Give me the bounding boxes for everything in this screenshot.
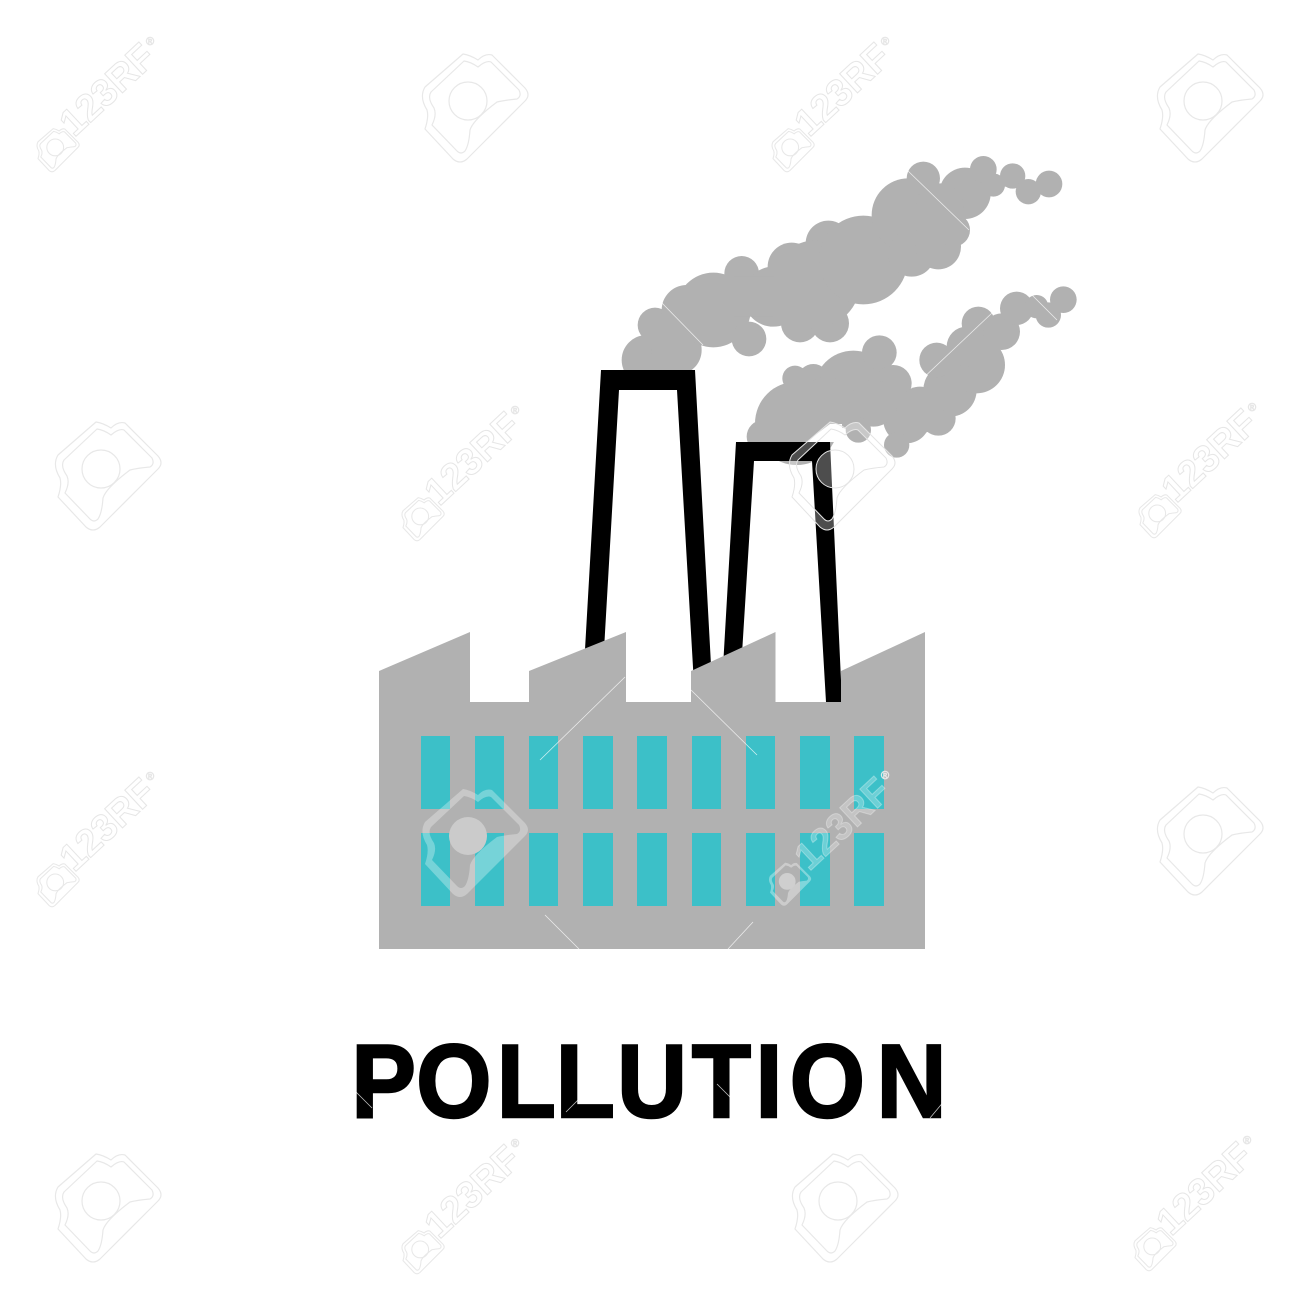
lower smoke plume body <box>747 286 1077 465</box>
watermark: 123RF bottom right: 123RF <box>1149 1135 1261 1243</box>
watermark: 123RF bottom left: 123RF <box>417 1138 529 1246</box>
stamp: second row over chimney <box>789 422 895 530</box>
stamp: over factory windows <box>422 789 528 897</box>
watermark: 123RF row two right: 123RF <box>1154 402 1266 510</box>
stamp: top row right <box>1157 54 1263 162</box>
stamp: third row right <box>1157 787 1263 895</box>
lower smoke plume lobes <box>846 417 909 458</box>
watermark: 123RF bottom right: ® <box>1243 1135 1251 1147</box>
gap under lower plume <box>806 424 842 442</box>
watermark: 123RF top centre: 123RF <box>787 36 899 144</box>
tall chimney <box>582 370 713 702</box>
watermark: 123RF top left: ® <box>146 36 154 48</box>
watermark: 123RF row two right: ® <box>1248 402 1256 414</box>
stamp: bottom row centre <box>792 1154 898 1262</box>
stamp: bottom row left <box>55 1154 161 1262</box>
upper smoke plume <box>622 156 1062 385</box>
short chimney <box>721 442 842 702</box>
bottom row of windows <box>421 833 884 906</box>
top row of windows <box>421 736 884 809</box>
stamp: top row left <box>422 54 528 162</box>
watermark: 123RF over factory: ® <box>881 770 889 782</box>
smoke plumes <box>622 156 1077 465</box>
factory silhouette <box>379 632 925 949</box>
factory building <box>379 632 925 949</box>
watermark: 123RF over factory: 123RF <box>787 770 899 878</box>
watermark: 123RF row two left: 123RF <box>417 405 529 513</box>
watermark: 123RF top left: 123RF <box>52 36 164 144</box>
stamp: second row left <box>55 422 161 530</box>
faint lattice lines <box>356 170 1057 1118</box>
watermark: 123RF over factory <box>769 770 899 906</box>
watermark: 123RF row three left: 123RF <box>52 771 164 879</box>
watermark: 123RF bottom left: ® <box>511 1138 519 1150</box>
title: POLLUTION <box>351 1024 946 1140</box>
watermark: 123RF row two left: ® <box>511 405 519 417</box>
watermark: 123RF row three left: ® <box>146 771 154 783</box>
watermark: 123RF top centre: ® <box>881 36 889 48</box>
